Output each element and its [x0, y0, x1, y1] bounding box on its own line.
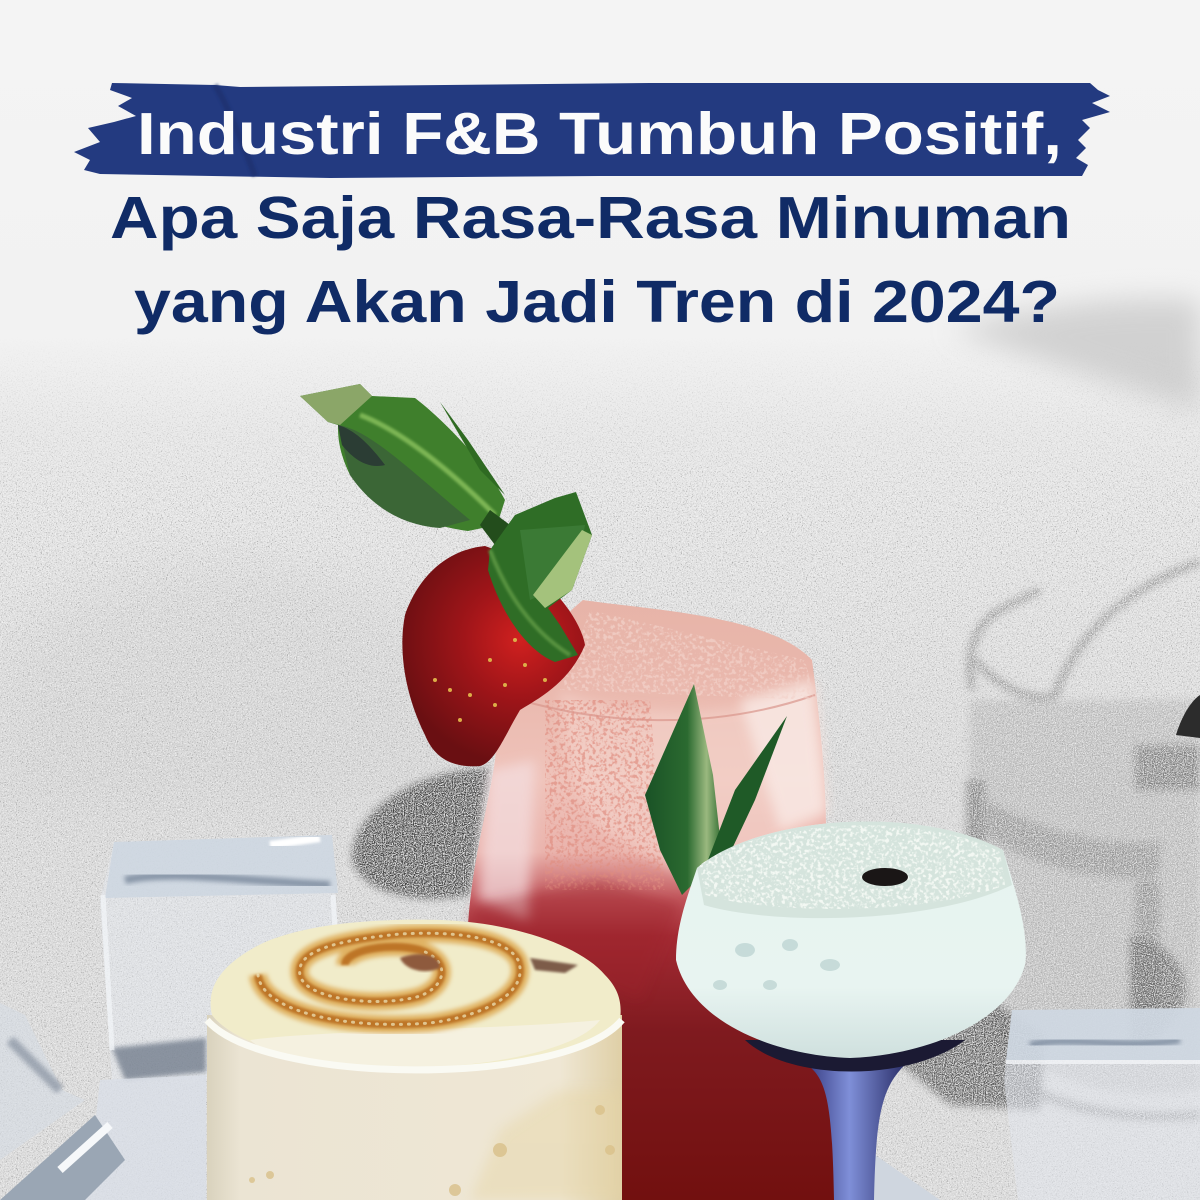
blurred grayscale jar on the right	[895, 562, 1200, 1117]
pandan leaves	[645, 684, 787, 895]
basil leaves	[300, 384, 592, 662]
drink shadow on the table	[352, 768, 490, 899]
ice fragments at the bottom	[622, 1150, 940, 1200]
title line 3: yang Akan Jadi Tren di 2024?	[134, 269, 1060, 335]
coffee bean	[862, 868, 908, 886]
title	[110, 101, 1071, 335]
white foam coupe cocktail	[676, 822, 1026, 1072]
stem of the coupe glass	[800, 1060, 910, 1200]
ice cube: back left	[100, 835, 345, 1080]
title line 1: Industri F&B Tumbuh Positif,	[137, 101, 1062, 167]
red layered drink glass	[468, 600, 836, 1200]
strawberry garnish	[402, 546, 585, 766]
banner fold crease	[215, 85, 255, 176]
title banner brush stroke	[74, 83, 1110, 178]
ice cube: lower right	[1004, 1008, 1200, 1200]
ice cube: lower left cluster	[0, 1003, 206, 1200]
cream latte cup with torched swirl	[207, 920, 622, 1200]
background with grainy texture	[0, 288, 1200, 1200]
title line 2: Apa Saja Rasa-Rasa Minuman	[110, 185, 1071, 251]
